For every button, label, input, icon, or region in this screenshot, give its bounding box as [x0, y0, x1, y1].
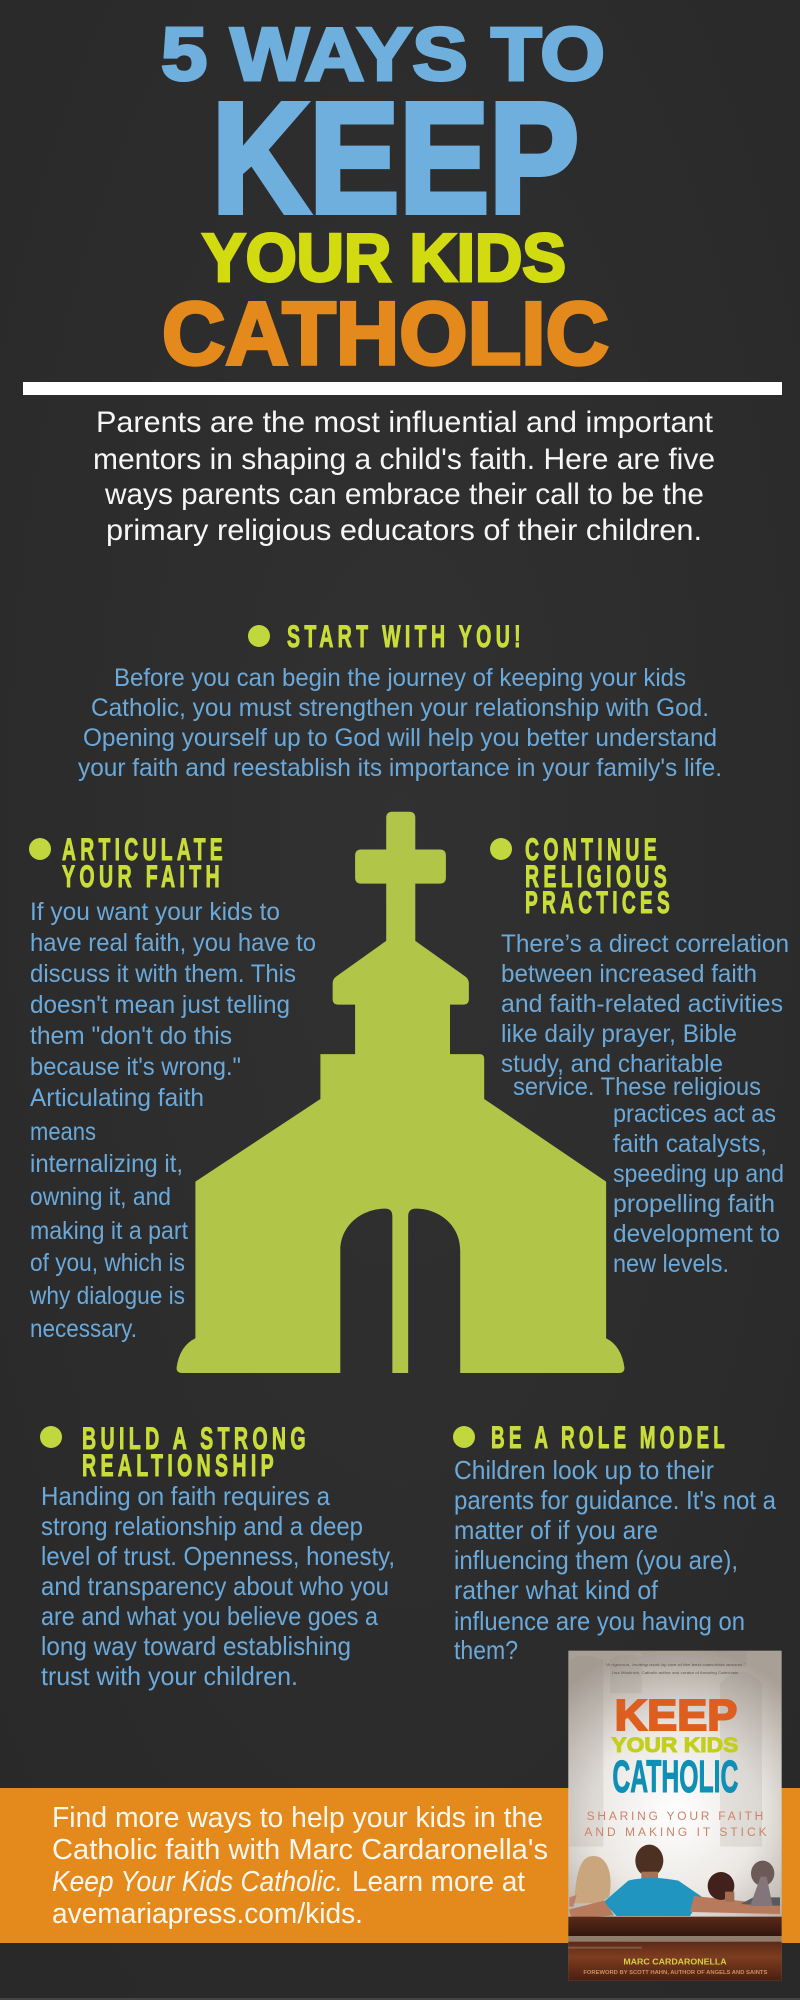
bullet dot	[248, 625, 270, 647]
body text: means	[30, 1118, 96, 1146]
body text: parents for guidance. It's not a	[454, 1485, 776, 1515]
bullet dot	[40, 1426, 62, 1448]
intro text: primary religious educators of their children.	[106, 514, 702, 547]
call-to-action text: Keep Your Kids Catholic.	[52, 1866, 343, 1898]
intro text: mentors in shaping a child's faith. Here are five	[93, 443, 715, 476]
body text	[454, 1455, 776, 1665]
cover subtitle: SHARING YOUR FAITH	[587, 1809, 763, 1823]
body text: Children look up to their	[454, 1455, 714, 1485]
call-to-action text: Find more ways to help your kids in the	[52, 1802, 543, 1834]
section: articulate your faith	[29, 831, 316, 1343]
cover subtitle: AND MAKING IT STICK	[584, 1825, 767, 1839]
heading: RELIGIOUS	[525, 858, 671, 894]
title: 5 WAYS TO	[161, 12, 605, 96]
body text: There’s a direct correlation	[501, 930, 789, 958]
body text: and transparency about who you	[41, 1571, 389, 1601]
cover pew	[568, 1917, 782, 1981]
title: KEEP	[212, 71, 579, 246]
body text: because it's wrong."	[30, 1053, 241, 1081]
body text: influence are you having on	[454, 1606, 745, 1636]
title: YOUR KIDS	[202, 220, 566, 296]
body text: discuss it with them. This	[30, 960, 296, 988]
white divider bar	[23, 382, 782, 395]
heading: START WITH YOU!	[287, 618, 525, 654]
cover quote: "A rigorous, inviting work by one of the best catechists around."	[605, 1663, 746, 1667]
body text: between increased faith	[501, 960, 757, 988]
body text: are and what you believe goes a	[41, 1601, 378, 1631]
cover author: MARC CARDARONELLA	[623, 1956, 727, 1966]
cover subtitle	[584, 1809, 767, 1839]
heading: PRACTICES	[525, 884, 674, 920]
body text: long way toward establishing	[41, 1631, 351, 1661]
body text: influencing them (you are),	[454, 1545, 738, 1575]
body text: of you, which is	[30, 1249, 185, 1277]
body text: propelling faith	[613, 1190, 775, 1218]
intro text: ways parents can embrace their call to be the	[104, 478, 704, 511]
body text: service. These religious	[513, 1073, 761, 1101]
heading	[62, 831, 227, 894]
body text: new levels.	[613, 1250, 729, 1278]
body text: necessary.	[30, 1315, 137, 1343]
intro text: Parents are the most influential and important	[96, 406, 714, 439]
body text: Before you can begin the journey of keeping your kids	[114, 664, 686, 692]
cover quote	[605, 1663, 746, 1675]
orange call-to-action band	[0, 1788, 800, 1943]
cover family photo	[569, 1845, 780, 1918]
body text: development to	[613, 1220, 780, 1248]
body text: have real faith, you have to	[30, 929, 316, 957]
body text: them "don't do this	[30, 1022, 232, 1050]
call-to-action text: Learn more at	[352, 1866, 525, 1898]
body text: Articulating faith	[30, 1084, 204, 1112]
heading: BUILD A STRONG	[82, 1420, 310, 1456]
cover title: KEEP	[615, 1692, 737, 1740]
body text: If you want your kids to	[30, 898, 280, 926]
body text: Catholic, you must strengthen your relationship with God.	[91, 694, 709, 722]
section: build a strong relationship	[40, 1420, 395, 1691]
body text: your faith and reestablish its importance in your family's life.	[78, 754, 722, 782]
section: be a role model	[453, 1419, 776, 1665]
body text: them?	[454, 1635, 518, 1665]
heading: ARTICULATE	[62, 831, 227, 867]
body text: owning it, and	[30, 1183, 171, 1211]
cover quote: Lisa Mladinich, Catholic author and creator of Amazing Catechists	[612, 1671, 739, 1675]
cover title: YOUR KIDS	[611, 1732, 738, 1757]
body text	[78, 664, 722, 782]
body text: study, and charitable	[501, 1050, 723, 1078]
body text: like daily prayer, Bible	[501, 1020, 737, 1048]
body text: rather what kind of	[454, 1575, 659, 1605]
call-to-action text: avemariapress.com/kids.	[52, 1898, 363, 1930]
body text	[501, 930, 789, 1278]
intro text	[93, 406, 715, 547]
body text: and faith-related activities	[501, 990, 783, 1018]
title: CATHOLIC	[162, 283, 609, 383]
bullet dot	[490, 838, 512, 860]
cover background windows	[569, 1651, 762, 1847]
title	[161, 12, 609, 383]
body text: Opening yourself up to God will help you better understand	[83, 724, 717, 752]
icon: church silhouette	[177, 812, 624, 1373]
heading: YOUR FAITH	[62, 858, 224, 894]
call-to-action text: Catholic faith with Marc Cardaronella's	[52, 1834, 548, 1866]
body text: internalizing it,	[30, 1150, 183, 1178]
cover author: FOREWORD BY SCOTT HAHN, AUTHOR OF ANGELS AND SAINTS	[583, 1970, 768, 1976]
body text: making it a part	[30, 1217, 188, 1245]
body text: doesn't mean just telling	[30, 991, 290, 1019]
bullet dot	[29, 838, 51, 860]
body text: faith catalysts,	[613, 1130, 767, 1158]
book cover	[568, 1651, 782, 1981]
heading: REALTIONSHIP	[82, 1447, 278, 1483]
body text	[29, 898, 316, 1343]
section: continue religious practices	[490, 831, 789, 1278]
body text: speeding up and	[613, 1160, 784, 1188]
heading	[82, 1420, 310, 1483]
cover title	[611, 1692, 738, 1802]
bullet dot	[453, 1426, 475, 1448]
heading	[525, 831, 674, 920]
cover author	[583, 1956, 768, 1976]
body text	[41, 1481, 395, 1691]
body text: strong relationship and a deep	[41, 1511, 363, 1541]
heading: CONTINUE	[525, 831, 661, 867]
body text: matter of if you are	[454, 1515, 658, 1545]
body text: practices act as	[613, 1100, 776, 1128]
call-to-action text	[52, 1802, 548, 1930]
body text: trust with your children.	[41, 1661, 298, 1691]
body text: why dialogue is	[29, 1282, 185, 1310]
body text: level of trust. Openness, honesty,	[41, 1541, 395, 1571]
body text: Handing on faith requires a	[41, 1481, 330, 1511]
section: start with you	[78, 618, 722, 782]
